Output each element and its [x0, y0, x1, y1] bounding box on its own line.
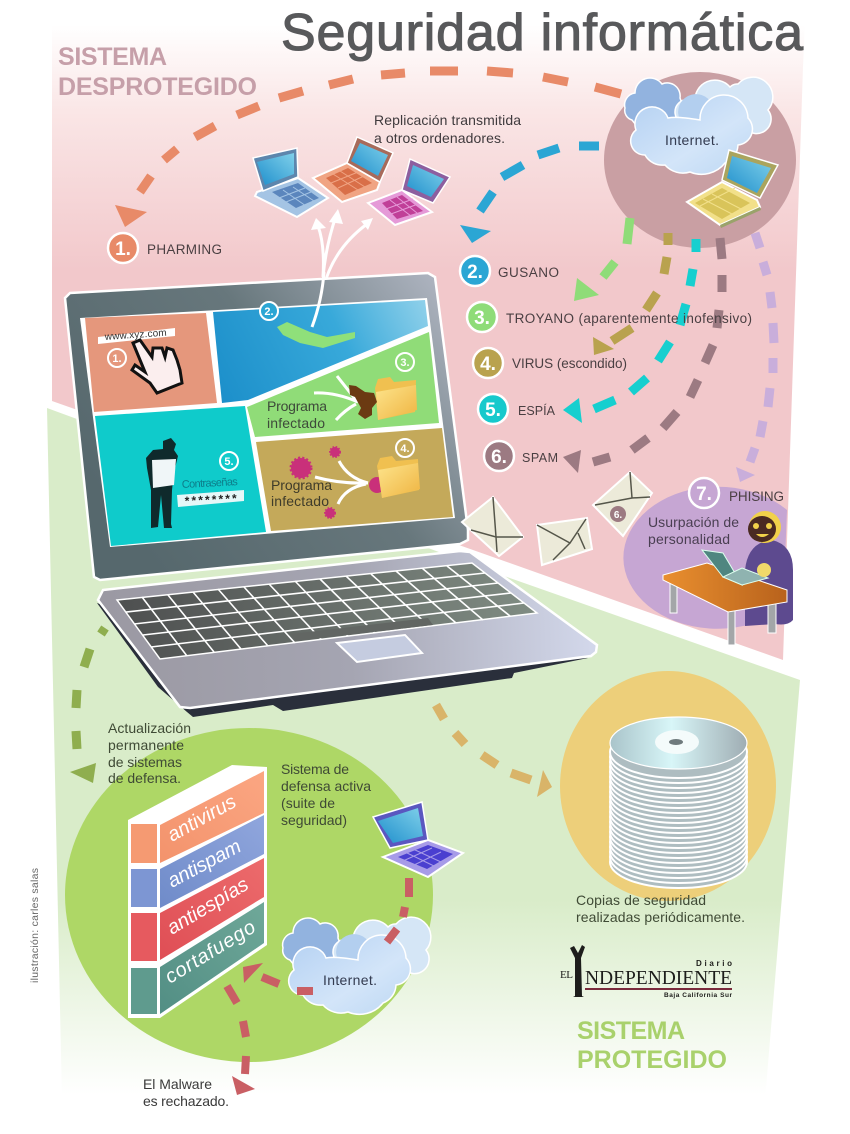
icon: envelope 1: [462, 497, 523, 556]
screen tile 3: troyano: [247, 332, 439, 437]
text: malware: [143, 1076, 229, 1109]
icon: cd stack: [610, 717, 747, 888]
laptop lid: [65, 273, 468, 580]
arrows: worm replication: [311, 209, 373, 290]
arrow: virus: [593, 233, 668, 355]
screen tile 4: virus: Programa: [271, 477, 332, 493]
badge: spam: 6.: [491, 447, 507, 468]
backdrop: defense circle: [65, 728, 433, 1062]
text: malware: es rechazado.: [143, 1093, 229, 1109]
layer: antispam: antispam: [164, 835, 245, 892]
icon: hacker at desk: [663, 511, 793, 645]
laptop base: [98, 551, 597, 708]
screen tile 5: espia: 5.: [224, 456, 234, 468]
screen tile 5: espia: ********: [184, 491, 237, 508]
screen tile 4: virus: [256, 428, 453, 531]
screen tile 1: pharming: 1.: [112, 353, 122, 365]
badge: pharming: PHARMING: [147, 242, 222, 257]
icon: yellow laptop: [687, 150, 778, 228]
layer: antispam: [160, 815, 264, 908]
icon: orange laptop: [313, 137, 393, 202]
firewall wall: [128, 765, 267, 1018]
icon: internet cloud top: Internet.: [665, 132, 719, 148]
badge: virus: [473, 348, 627, 378]
text: copias: realizadas periódicamente.: [576, 909, 745, 925]
heading: sistema protegido: SISTEMA: [577, 1017, 685, 1045]
text: sistema de defensa: seguridad): [281, 812, 347, 828]
panel: sistema protegido background: [47, 408, 800, 1100]
badge: pharming: 1.: [115, 239, 131, 260]
touchpad: [337, 635, 422, 662]
arrow: pharming: [115, 71, 621, 227]
keyboard: [117, 563, 537, 659]
text: sistema de defensa: Sistema de: [281, 761, 349, 777]
text: usurpacion: Usurpación de: [648, 514, 739, 530]
heading: sistema protegido: PROTEGIDO: [577, 1046, 727, 1074]
layer: cortafuego: [160, 902, 264, 1014]
badge: pharming: [108, 233, 222, 263]
badge: troyano: 3.: [474, 308, 490, 329]
layer: antivirus: [160, 771, 264, 863]
text: sistema de defensa: defensa activa: [281, 778, 371, 794]
logo: el independiente: Diario: [696, 959, 732, 968]
text: replicacion: Replicación transmitida: [374, 112, 521, 128]
badge: phising: PHISING: [729, 489, 784, 504]
layer: antivirus: antivirus: [164, 791, 240, 846]
text: malware: El Malware: [143, 1076, 212, 1092]
panel: sistema desprotegido background: [52, 22, 805, 660]
text: actualizacion: Actualización: [108, 720, 191, 736]
text: sistema de defensa: (suite de: [281, 795, 335, 811]
layer: antiespias: [160, 858, 264, 960]
badge: espia: ESPÍA: [518, 403, 556, 418]
badge: gusano: GUSANO: [498, 265, 559, 280]
badge: spam: [484, 441, 558, 471]
layer: cortafuego: cortafuego: [161, 916, 260, 988]
screen panel: [80, 298, 455, 547]
badge: troyano: TROYANO (aparentemente inofensivo): [506, 311, 752, 326]
screen tile 2: gusano: [213, 272, 428, 403]
text: usurpacion: personalidad: [648, 531, 730, 547]
icon: envelope 3 with badge: [593, 472, 652, 536]
badge: virus: 4.: [480, 354, 496, 375]
arrow: phising: [736, 233, 774, 482]
screen tile 5: espia: [95, 406, 266, 546]
screen tile 3: troyano: infectado: [267, 415, 325, 431]
credit: ilustración: carles salas: [29, 868, 41, 983]
badge: troyano: [467, 302, 752, 332]
icon: envelope 3 with badge: 6.: [614, 510, 622, 521]
badge: espia: [478, 394, 556, 424]
icon: purple laptop: [373, 802, 463, 877]
text: actualizacion: permanente: [108, 737, 184, 753]
title: Seguridad informática: [281, 4, 803, 62]
arrow: malware rejected: [227, 878, 409, 1095]
logo: el independiente: NDEPENDIENTE: [585, 968, 732, 989]
arrow: actualizacion: [70, 628, 105, 783]
backdrop: internet circle: [604, 72, 796, 248]
screen tile 3: troyano: Programa: [267, 398, 327, 414]
icon: pink laptop: [368, 159, 450, 225]
laptop: [65, 272, 597, 717]
text: copias: [576, 892, 745, 925]
icon: internet cloud bottom: Internet.: [323, 972, 377, 988]
text: usurpacion: [648, 514, 739, 547]
text: actualizacion: [108, 720, 191, 786]
text: replicacion: [374, 112, 521, 146]
arrow: espia: [563, 239, 696, 423]
arrow: gusano: [460, 146, 599, 243]
text: actualizacion: de defensa.: [108, 770, 181, 786]
arrow: troyano: [574, 218, 630, 301]
icon: internet cloud bottom: [283, 917, 431, 1014]
laptop underside: [97, 603, 588, 717]
arrow: spam: [563, 238, 722, 473]
logo: el independiente: Baja California Sur: [664, 992, 732, 999]
icon: internet cloud top: [625, 77, 773, 174]
backdrop: phishing circle: [623, 487, 787, 629]
screen tile 1: pharming: www.xyz.com: [103, 328, 167, 343]
badge: phising: 7.: [696, 484, 712, 505]
heading: sistema desprotegido: [58, 43, 257, 101]
heading: sistema desprotegido: SISTEMA: [58, 43, 167, 71]
text: actualizacion: de sistemas: [108, 754, 182, 770]
text: copias: Copias de seguridad: [576, 892, 706, 908]
logo: el independiente: EL: [560, 969, 573, 981]
badge: gusano: [460, 256, 559, 286]
badge: gusano: 2.: [467, 262, 483, 283]
screen tile 2: gusano: 2.: [264, 306, 274, 318]
screen tile 3: troyano: 3.: [400, 357, 410, 369]
heading: sistema protegido: [577, 1017, 727, 1074]
icon: blue laptop: [253, 148, 328, 217]
badge: phising: [689, 478, 784, 508]
arrow: copias: [436, 705, 552, 797]
layer: antiespias: antiespías: [163, 874, 253, 939]
text: sistema de defensa: [281, 761, 371, 828]
text: replicacion: a otros ordenadores.: [374, 130, 505, 146]
icon: envelope 2: [537, 518, 592, 565]
heading: sistema desprotegido: DESPROTEGIDO: [58, 73, 257, 101]
screen tile 4: virus: 4.: [400, 443, 410, 455]
screen tile 1: pharming: [85, 313, 217, 412]
badge: virus: VIRUS (escondido): [512, 356, 627, 371]
badge: espia: 5.: [485, 400, 501, 421]
badge: spam: SPAM: [522, 451, 558, 465]
logo: el independiente: [560, 945, 732, 999]
screen tile 5: espia: Contraseñas: [182, 476, 239, 491]
backdrop: backup circle: [560, 671, 776, 901]
screen tile 4: virus: infectado: [271, 493, 329, 509]
